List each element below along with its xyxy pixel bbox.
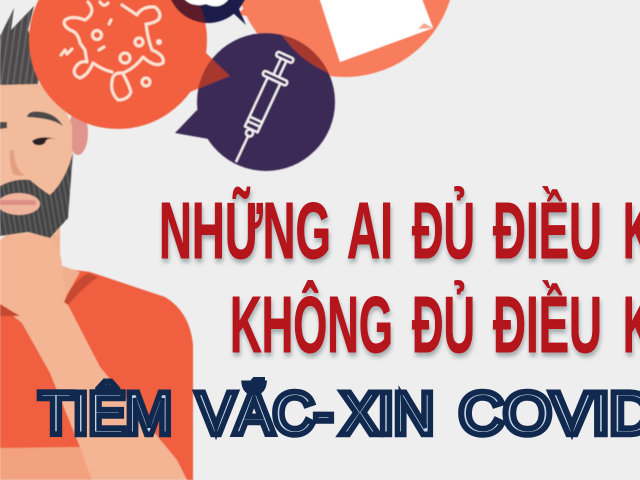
subtitle inline stripe layer: VẮC- [197, 382, 333, 446]
speech bubble: document [235, 0, 455, 77]
nose [10, 150, 25, 176]
eye [32, 137, 56, 145]
beard [0, 152, 73, 238]
lower arm [0, 447, 98, 480]
subtitle inline stripe layer [39, 382, 640, 446]
subtitle: navy inline text [39, 382, 640, 446]
subtitle inline stripe layer: COVID [459, 382, 640, 446]
hair [0, 6, 40, 90]
subtitle inline stripe layer: TIÊM [39, 382, 172, 446]
headline line 1: AI [347, 186, 393, 275]
ear [68, 111, 88, 155]
subtitle base layer: TIÊM [39, 382, 172, 446]
subtitle inline stripe layer: XIN [341, 382, 434, 446]
headline line 1: ĐỦ [412, 186, 475, 275]
icon: white cloud [183, 0, 228, 6]
headline line 2: KHÔNG [230, 280, 393, 369]
speech bubble: small dark [167, 0, 249, 25]
man illustration [0, 6, 193, 480]
eyebrow [27, 112, 63, 126]
subtitle base layer: COVID [459, 382, 640, 446]
headline line 2: ĐỦ [412, 280, 475, 369]
mouth [0, 193, 40, 215]
face [0, 84, 72, 235]
icon: virus [61, 2, 163, 100]
subtitle base layer [39, 382, 640, 446]
headline line 1: NHỮNG [159, 186, 331, 275]
neck [0, 225, 80, 310]
title: red headline [159, 186, 640, 369]
overlap with virus bubble [171, 0, 206, 23]
icon: syringe [224, 50, 298, 167]
speech bubble: syringe [174, 32, 336, 172]
collar [64, 273, 98, 305]
icon: paper document [318, 0, 433, 62]
forearm and hand [0, 231, 187, 480]
body sweater [0, 268, 193, 480]
headline line 1 [159, 186, 640, 275]
subtitle base layer: XIN [341, 382, 434, 446]
overlap tints [198, 35, 328, 90]
speech bubble: virus [29, 0, 230, 129]
subtitle base layer: VẮC- [197, 382, 333, 446]
